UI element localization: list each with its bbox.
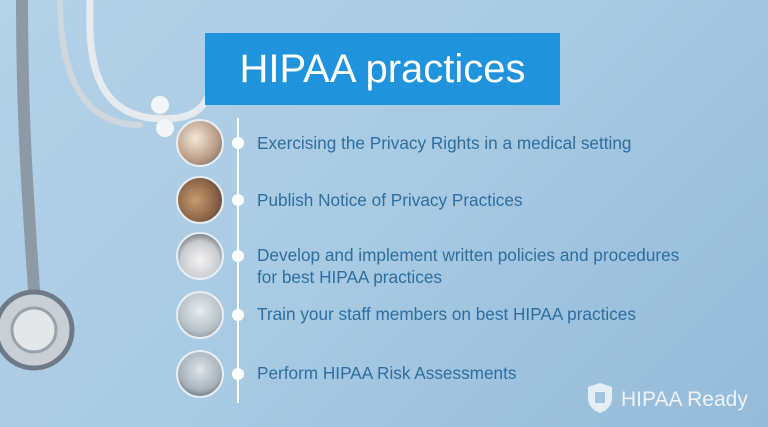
text: Train your staff members on best HIPAA practices (257, 304, 636, 324)
logo (588, 383, 748, 413)
title (205, 33, 560, 105)
item 3 (176, 232, 679, 287)
text: for best HIPAA practices (257, 267, 442, 287)
item 4 (176, 291, 636, 339)
logo: HIPAA Ready (621, 388, 748, 411)
title: HIPAA practices (239, 47, 526, 91)
icon: shield (588, 383, 612, 413)
timeline line (237, 118, 239, 403)
text: Exercising the Privacy Rights in a medical setting (257, 133, 631, 153)
item 2 (176, 176, 523, 224)
text: Perform HIPAA Risk Assessments (257, 363, 516, 383)
item 1 (176, 119, 631, 167)
text: Publish Notice of Privacy Practices (257, 190, 523, 210)
item 5 (176, 350, 516, 398)
text: Develop and implement written policies and procedures (257, 245, 679, 265)
